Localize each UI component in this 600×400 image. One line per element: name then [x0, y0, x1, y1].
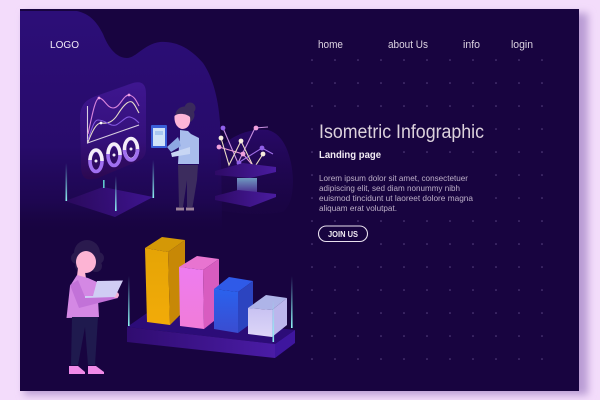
torso — [66, 275, 99, 318]
shoes — [176, 208, 184, 210]
platform under screen — [65, 187, 153, 217]
shoes — [69, 366, 85, 374]
subtitle: Landing page — [319, 150, 381, 161]
head — [174, 114, 190, 129]
donut gauges — [90, 138, 138, 172]
bar: blue — [214, 277, 253, 333]
mini line chart on plinth — [217, 126, 273, 168]
chart points — [98, 97, 100, 99]
head — [76, 251, 96, 273]
title: Isometric Infographic — [319, 122, 484, 143]
person with laptop — [66, 240, 123, 374]
dot grid — [311, 59, 543, 360]
hair — [184, 102, 196, 114]
background blob — [20, 11, 222, 237]
bar: white — [248, 295, 287, 337]
button: join us: JOIN US — [328, 229, 358, 239]
arm — [167, 137, 181, 152]
light beams — [66, 160, 154, 211]
nav: info: info — [463, 39, 480, 51]
body text: euismod tincidunt ut laoreet dolore magna — [319, 193, 473, 203]
screen panel — [80, 82, 146, 179]
bar: pink — [179, 256, 219, 329]
nav: about us: about Us — [388, 39, 428, 51]
chart axes — [88, 106, 139, 143]
background blob: right plinth — [218, 130, 293, 214]
nav: home: home — [318, 39, 343, 51]
body text — [319, 173, 473, 213]
button: join us — [318, 226, 368, 242]
plinth: upper and lower plates — [215, 163, 276, 207]
platform — [127, 313, 295, 344]
clipboard — [151, 125, 167, 148]
body text: adipiscing elit, sed diam nonummy nibh — [319, 183, 460, 193]
nav: login: login — [511, 39, 533, 51]
bar chart on platform — [127, 237, 295, 358]
bar: yellow — [145, 237, 185, 325]
body text: Lorem ipsum dolor sit amet, consectetuer — [319, 173, 468, 183]
hair — [71, 240, 104, 272]
illustration: line chart screen — [80, 82, 146, 179]
arm — [70, 280, 118, 308]
navigation — [318, 39, 533, 51]
legs — [178, 165, 198, 207]
person with clipboard — [151, 102, 199, 210]
body text: aliquam erat volutpat. — [319, 203, 397, 213]
laptop — [85, 280, 123, 298]
torso — [178, 130, 199, 164]
logo: LOGO — [50, 39, 79, 51]
chart lines — [88, 95, 139, 134]
hand — [113, 292, 119, 298]
light beams — [128, 276, 130, 326]
neck — [77, 268, 86, 278]
legs — [71, 317, 98, 365]
